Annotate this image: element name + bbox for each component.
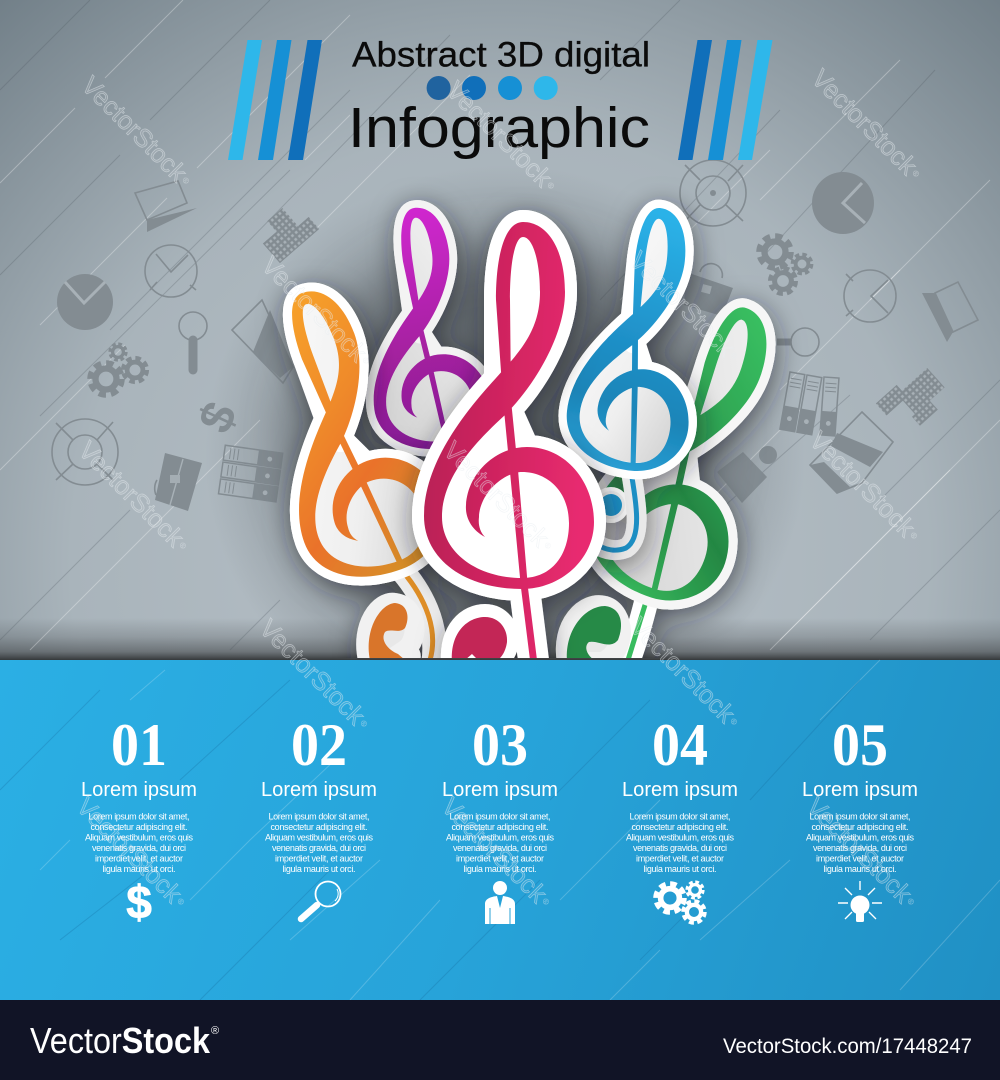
watermarks: ® [545, 180, 556, 191]
body text 4 [626, 812, 734, 874]
icon: buildings right [876, 362, 953, 438]
icon: pie chart right [812, 172, 874, 234]
watermarks: VectorStock [73, 436, 189, 552]
heading: Infographic: Infographic [348, 96, 650, 160]
body text 5 [806, 812, 914, 874]
footer image id: VectorStock.com/17448247 [723, 1035, 972, 1058]
body text 1: Aliquam vestibulum, eros quis [85, 832, 194, 842]
icon: tablet right [810, 412, 893, 493]
soft shadow behind the clefs [290, 240, 720, 640]
icon: dollar sign left: $ [189, 394, 248, 441]
purple clef [360, 191, 484, 462]
watermarks: ® [360, 355, 371, 366]
icon: binders left [218, 445, 283, 502]
body text 4: ligula mauris ut orci. [644, 864, 716, 874]
icon: business person right [717, 446, 777, 503]
icon: magnifier [301, 882, 340, 919]
body text 1 [85, 812, 194, 874]
body text 1: Lorem ipsum dolor sit amet, [88, 812, 190, 822]
body text 4: Aliquam vestibulum, eros quis [626, 832, 734, 842]
body text 5: Aliquam vestibulum, eros quis [806, 832, 914, 842]
body text 2: Aliquam vestibulum, eros quis [265, 832, 374, 842]
body text 5: consectetur adipiscing elit. [812, 822, 908, 832]
watermarks: ® [177, 540, 188, 551]
body text 1: consectetur adipiscing elit. [90, 822, 188, 832]
body text 1: venenatis gravida, dui orci [92, 843, 186, 853]
blue clef [561, 201, 711, 550]
four blue dots [427, 76, 558, 100]
icon: laptop left [135, 181, 197, 232]
column 5: light bulb: Lorem ipsum [802, 779, 918, 801]
icon: clock left [145, 245, 197, 297]
body text 5: ligula mauris ut orci. [824, 864, 896, 874]
watermarks: ® [905, 896, 916, 907]
body text 3: Lorem ipsum dolor sit amet, [450, 812, 550, 822]
heading: Abstract 3D digital: Abstract 3D digital [352, 36, 650, 74]
body text 4: Lorem ipsum dolor sit amet, [630, 812, 730, 822]
icon: gears [656, 882, 705, 923]
watermarks: VectorStock [254, 614, 370, 730]
watermarks: VectorStock [256, 251, 372, 367]
body text 3: ligula mauris ut orci. [464, 864, 536, 874]
body text 1: imperdiet velit, et auctor [95, 854, 183, 864]
body text 2: Lorem ipsum dolor sit amet, [268, 812, 370, 822]
icon: dollar sign: $ [126, 876, 152, 928]
right striped bars [678, 40, 772, 160]
icon: briefcase right [684, 264, 733, 316]
icon: binders right [780, 372, 839, 436]
icon: magnifier left [179, 312, 207, 370]
watermarks: ® [728, 350, 739, 361]
column 3: person: Lorem ipsum [442, 779, 558, 801]
watermarks: ® [542, 540, 553, 551]
watermarks: ® [180, 175, 191, 186]
body text 2: venenatis gravida, dui orci [272, 843, 366, 853]
body text 3 [446, 812, 554, 874]
watermarks: ® [175, 896, 186, 907]
body text 5: venenatis gravida, dui orci [813, 843, 907, 853]
icon: pie chart left [57, 274, 113, 330]
body text 2 [265, 812, 374, 874]
icon: buildings left [254, 199, 319, 263]
watermarks: VectorStock [71, 792, 187, 908]
green clef [566, 283, 802, 662]
icon: laptop right [922, 282, 978, 342]
body text 5: imperdiet velit, et auctor [816, 854, 904, 864]
column 3: person: 03 [472, 712, 528, 778]
column 3: person [442, 712, 558, 924]
icon: target left [52, 419, 118, 485]
column 2: magnifier: 02 [291, 712, 347, 778]
column 5: light bulb [802, 712, 918, 922]
body text 4: venenatis gravida, dui orci [633, 843, 727, 853]
title group [228, 36, 772, 160]
blue content panel [0, 660, 1000, 1000]
watermarks: VectorStock [438, 436, 554, 552]
watermarks: ® [908, 530, 919, 541]
treble clef cluster [224, 201, 802, 664]
column 4: gears [622, 712, 738, 923]
diagonal light and dark streaks [0, 0, 1000, 650]
watermarks: VectorStock [624, 612, 740, 728]
column 1: dollar [81, 712, 197, 928]
icon: business person [485, 881, 515, 924]
body text 2: consectetur adipiscing elit. [270, 822, 368, 832]
body text 2: ligula mauris ut orci. [282, 864, 356, 874]
icon: target right [680, 160, 746, 226]
footer logo: VectorStock [30, 1020, 211, 1061]
column 1: dollar: Lorem ipsum [81, 779, 197, 801]
left striped bars [228, 40, 322, 160]
column 2: magnifier: Lorem ipsum [261, 779, 377, 801]
icon: gears right [759, 236, 812, 294]
watermarks: VectorStock [801, 792, 917, 908]
body text 2: imperdiet velit, et auctor [275, 854, 363, 864]
watermarks: ® [728, 716, 739, 727]
footer band [0, 1000, 1000, 1080]
icon: briefcase left [155, 453, 202, 511]
watermarks: VectorStock [806, 64, 922, 180]
icon: clock right [844, 270, 896, 322]
watermarks: VectorStock [76, 71, 192, 187]
body text 3: Aliquam vestibulum, eros quis [446, 832, 554, 842]
watermarks: ® [540, 896, 551, 907]
icon: magnifier right [777, 328, 819, 356]
left business icons [52, 181, 319, 511]
watermarks: VectorStock [624, 246, 740, 362]
body text 1: ligula mauris ut orci. [102, 864, 176, 874]
watermarks [71, 64, 927, 914]
grey background [0, 0, 1000, 745]
column 1: dollar: 01 [111, 712, 167, 778]
body text 3: consectetur adipiscing elit. [452, 822, 548, 832]
body text 4: consectetur adipiscing elit. [632, 822, 728, 832]
registered mark: ® [211, 1025, 219, 1037]
body text 3: venenatis gravida, dui orci [453, 843, 547, 853]
right business icons [680, 160, 978, 503]
watermarks: VectorStock [441, 76, 557, 192]
column 4: gears: Lorem ipsum [622, 779, 738, 801]
crimson clef [424, 222, 594, 662]
column 5: light bulb: 05 [832, 712, 888, 778]
column 4: gears: 04 [652, 712, 708, 778]
icon: tablet left [232, 300, 293, 383]
watermarks: ® [358, 718, 369, 729]
icon: gears left [90, 344, 147, 395]
column 2: magnifier [261, 712, 377, 919]
body text 3: imperdiet velit, et auctor [456, 854, 544, 864]
orange clef [270, 274, 455, 658]
watermarks: VectorStock [804, 426, 920, 542]
watermarks: ® [910, 168, 921, 179]
icon: light bulb [838, 881, 882, 922]
body text 5: Lorem ipsum dolor sit amet, [810, 812, 910, 822]
watermarks: VectorStock [436, 792, 552, 908]
body text 4: imperdiet velit, et auctor [636, 854, 724, 864]
